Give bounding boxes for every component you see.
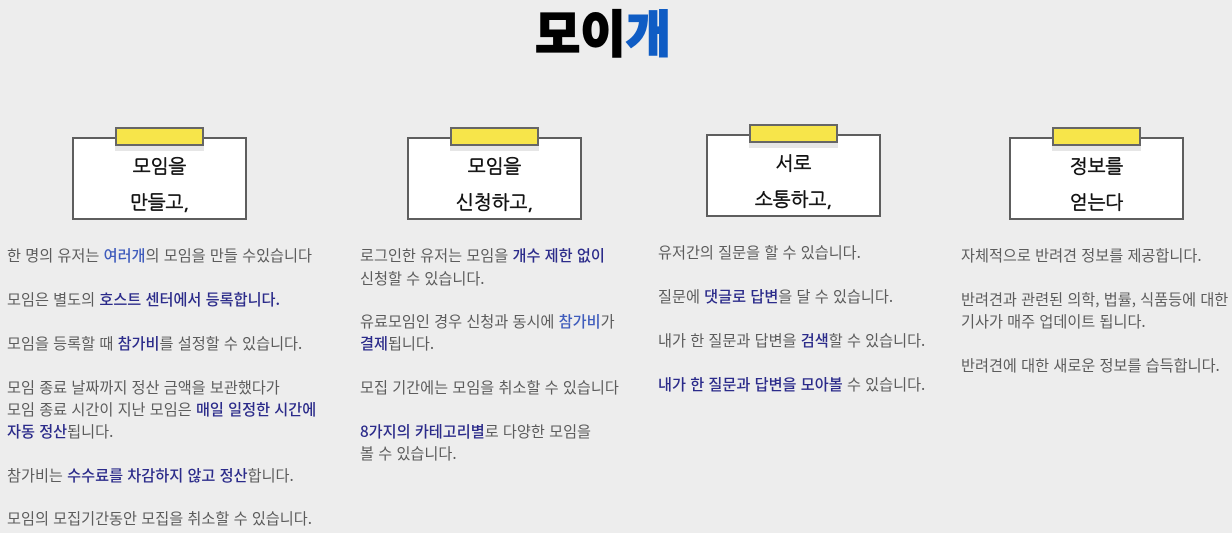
text block: column 4: 반려견에 대한 새로운 정보를 습득합니다. <box>961 354 1220 376</box>
text block: column 2: 결제됩니다. <box>360 332 434 354</box>
tape <box>749 124 838 143</box>
tape <box>450 127 539 146</box>
card heading: 모임을 <box>133 157 186 176</box>
card heading line 2: 만들고, <box>130 193 189 212</box>
panel: card 모임을 신청하고 <box>407 137 582 220</box>
card heading line 2: 소통하고, <box>755 190 832 209</box>
card heading line 2: 신청하고, <box>456 193 533 212</box>
text block: column 1: 모임 종료 날짜까지 정산 금액을 보관했다가 <box>7 376 280 398</box>
text block: column 2: 신청할 수 있습니다. <box>360 267 485 289</box>
text block: column 4: 반려견과 관련된 의학, 법률, 식품등에 대한 <box>961 288 1228 310</box>
tape <box>1052 127 1141 146</box>
text block: column 3: 유저간의 질문을 할 수 있습니다. <box>658 241 861 263</box>
text block: column 2: 모집 기간에는 모임을 취소할 수 있습니다 <box>360 376 619 398</box>
text block: column 1: 모임 종료 시간이 지난 모임은 매일 일정한 시간에 <box>7 398 316 420</box>
card heading: 서로 <box>776 154 811 173</box>
panel: card 서로 소통하고 <box>706 134 881 217</box>
text block: column 1: 자동 정산됩니다. <box>7 420 113 442</box>
text block: column 1: 모임의 모집기간동안 모집을 취소할 수 있습니다. <box>7 507 312 529</box>
text block: column 4: 자체적으로 반려견 정보를 제공합니다. <box>961 244 1202 266</box>
text block: column 2: 로그인한 유저는 모임을 개수 제한 없이 <box>360 244 605 266</box>
card heading line 2: 얻는다 <box>1070 193 1123 212</box>
card heading: 모임을 <box>468 157 521 176</box>
card heading: 정보를 <box>1070 157 1123 176</box>
text block: column 2: 8가지의 카테고리별로 다양한 모임을 <box>360 420 591 442</box>
text block: column 2: 볼 수 있습니다. <box>360 442 457 464</box>
text block: column 2: 유료모임인 경우 신청과 동시에 참가비가 <box>360 310 615 332</box>
text block: column 1: 모임을 등록할 때 참가비를 설정할 수 있습니다. <box>7 332 302 354</box>
panel: card 모임을 만들고 <box>72 137 247 220</box>
text block: column 3: 내가 한 질문과 답변을 검색할 수 있습니다. <box>658 329 925 351</box>
panel: card 정보를 얻는다 <box>1009 137 1184 220</box>
text block: column 3: 질문에 댓글로 답변을 달 수 있습니다. <box>658 285 893 307</box>
text block: column 4: 기사가 매주 업데이트 됩니다. <box>961 310 1146 332</box>
text block: column 1: 참가비는 수수료를 차감하지 않고 정산합니다. <box>7 464 294 486</box>
tape <box>115 127 204 146</box>
text block: column 1: 한 명의 유저는 여러개의 모임을 만들 수있습니다 <box>7 244 312 266</box>
text block: column 1: 모임은 별도의 호스트 센터에서 등록합니다. <box>7 288 280 310</box>
text block: column 3: 내가 한 질문과 답변을 모아볼 수 있습니다. <box>658 373 925 395</box>
